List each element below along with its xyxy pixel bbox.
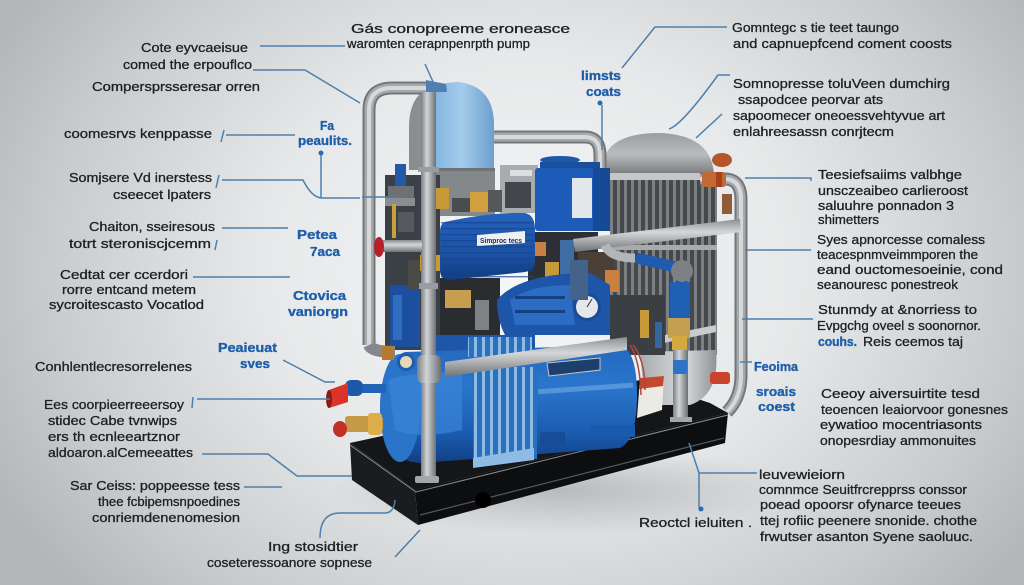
text block: right 5: Evpgchg oveel s soonornor. bbox=[817, 318, 981, 333]
text block: right 7: comnmce Seuitfrcrepprss conssor bbox=[759, 482, 968, 497]
text block: left 9: Sar Ceiss: poppeesse tess bbox=[70, 478, 241, 493]
text block: top center: waromten cerapnpenrpth pump bbox=[346, 36, 530, 51]
leader lines bbox=[192, 27, 813, 557]
text block: left 9 bbox=[70, 478, 241, 525]
text block: right 6 bbox=[820, 386, 1009, 448]
blue label: Ctovica: vaniorgn bbox=[288, 304, 348, 319]
text block: right 6: onopesrdiay ammonuites bbox=[820, 433, 977, 448]
text block: right 2 bbox=[733, 76, 950, 139]
text block: right 4: Syes apnorcesse comaless bbox=[817, 232, 986, 247]
text block: left 9: thee fcbipemsnpoedines bbox=[98, 494, 240, 509]
wiring bbox=[630, 345, 645, 395]
text block: left 1 bbox=[123, 40, 252, 72]
text block: right 4: seanouresc ponestreok bbox=[817, 277, 959, 292]
warning label bbox=[637, 376, 664, 418]
text block: left 6: Cedtat cer ccerdori bbox=[60, 267, 188, 282]
text block: right 1: Gomntegc s tie teet taungo bbox=[732, 20, 899, 35]
blue label: Peaieuat bbox=[218, 340, 278, 371]
tank name plate bbox=[547, 358, 600, 376]
text block: right 7: frwutser asanton Syene saoluuc. bbox=[760, 529, 973, 544]
brass connector bbox=[333, 413, 383, 437]
text block: right 3: shimetters bbox=[818, 212, 879, 227]
text block: bottom: Ing stosidtier bbox=[268, 539, 359, 554]
lower left elbow and gauge bbox=[369, 345, 415, 371]
inner machinery clutter bbox=[385, 164, 665, 365]
text block: left 5: totrt steroniscjcemm bbox=[69, 236, 211, 251]
middle long pipe bbox=[573, 219, 741, 252]
blue label: Feoima: coest bbox=[758, 399, 796, 414]
right pipe loop bbox=[700, 179, 741, 412]
blue control box bbox=[535, 156, 610, 231]
blue label: Fa peaulits: peaulits. bbox=[298, 133, 352, 148]
text block: right 2: sapoomecer oneoessvehtyvue art bbox=[733, 108, 945, 123]
red hose connector bbox=[326, 380, 386, 408]
text block: right 7: ttej rofiic peenere snonide. chothe bbox=[760, 513, 977, 528]
text block: right 7: poead opoorsr ofynarce teeues bbox=[760, 497, 962, 512]
text block: left 3: coomesrvs kenppasse bbox=[64, 126, 212, 141]
text block: right 4: teacespnmveimmporen the bbox=[817, 247, 978, 262]
text block: left 8: ers th ecnleeartznor bbox=[48, 429, 181, 444]
blue label: Feoima bbox=[754, 359, 799, 414]
blue label: limsts coats bbox=[581, 68, 621, 99]
text block: right 7: leuvewieiorn bbox=[759, 467, 845, 482]
blue label: Peaieuat: Peaieuat bbox=[218, 340, 278, 355]
text block: right 5: couhs. bbox=[818, 334, 857, 349]
text block: bottom bbox=[207, 539, 372, 570]
left red inlet valve bbox=[374, 237, 422, 257]
text block: right 5 bbox=[817, 302, 981, 349]
tank cooling fins bbox=[473, 367, 537, 459]
text block: left 2: Compersprsseresar orren bbox=[92, 79, 260, 94]
text block: left 1: comed the erpouflco bbox=[123, 57, 252, 72]
blue elbow with valve bbox=[570, 245, 693, 422]
text block: right 6: eywatioo mocentriasonts bbox=[820, 417, 983, 432]
text block: left 6: rorre entcand metem bbox=[62, 282, 196, 297]
text block: left 8: stidec Cabe tvnwips bbox=[48, 413, 178, 428]
text block: left 7: Conhlentlecresorrelenes bbox=[35, 359, 193, 374]
text block: left 8: Ees coorpieerreeersoy bbox=[44, 397, 185, 412]
text block: right 6: teoencen leaiorvoor gonesnes bbox=[821, 402, 1009, 417]
text block: top center bbox=[346, 21, 570, 51]
text block: right 3 bbox=[818, 167, 968, 227]
text block: left 5 bbox=[69, 219, 216, 251]
text block: right 2: enlahreesassn conrjtecm bbox=[733, 124, 894, 139]
text block: bottom: coseteressoanore sopnese bbox=[207, 555, 372, 570]
text block: top center: Gás conopreeme eroneasce bbox=[351, 21, 570, 36]
top pipe clamp bbox=[426, 80, 447, 92]
text block: left 6 bbox=[49, 267, 204, 312]
machine: gas compressor unit bbox=[326, 80, 790, 535]
text block: right 3: Teesiefsaiims valbhge bbox=[818, 167, 962, 182]
floor shadow bbox=[330, 445, 790, 535]
text block: right 4 bbox=[817, 232, 1003, 292]
pipe: left riser bbox=[369, 88, 432, 345]
pipe: central riser bbox=[415, 92, 441, 483]
text block: left 1: Cote eyvcaeisue bbox=[141, 40, 248, 55]
blue label: limsts coats: limsts bbox=[581, 68, 621, 83]
text block: right 3: unsczeaibeo carlieroost bbox=[818, 183, 968, 198]
blue label: Peaieuat: sves bbox=[240, 356, 270, 371]
blue label: Fa peaulits bbox=[298, 118, 352, 148]
blue horizontal tank bbox=[380, 337, 637, 468]
right gray tank bbox=[603, 133, 717, 405]
blue label: Fa peaulits: Fa bbox=[320, 118, 335, 133]
blue label: Petea: 7aca bbox=[310, 244, 341, 259]
blue label: Petea bbox=[297, 227, 341, 259]
blue label: limsts coats: coats bbox=[586, 84, 621, 99]
pressure gauge bbox=[573, 293, 601, 321]
blue label: Petea: Petea bbox=[297, 227, 338, 242]
text block: bottom callout: Reoctcl ieluiten . bbox=[639, 515, 752, 530]
text block: left 9: conriemdenenomesion bbox=[92, 510, 240, 525]
text block: right 2: ssapodcee peorvar ats bbox=[738, 92, 884, 107]
blue motor bbox=[440, 213, 535, 280]
base platform bbox=[350, 380, 728, 525]
text block: left 4: cseecet lpaters bbox=[113, 187, 212, 202]
text block: right 3: saluuhre ponnadon 3 bbox=[818, 198, 954, 213]
motor label: Simproc tecs bbox=[480, 236, 522, 245]
upper blue vessel bbox=[409, 82, 495, 216]
right orange valves bbox=[702, 153, 732, 384]
blue label: Ctovica: Ctovica bbox=[293, 288, 347, 303]
box label bbox=[572, 178, 592, 218]
blue label: Feoima: Feoima bbox=[754, 359, 799, 374]
upper horizontal pipe bbox=[494, 137, 600, 172]
text block: left 8: aldoaron.alCemeeattes bbox=[48, 445, 194, 460]
text block: right 6: Ceeoy aiversuirtite tesd bbox=[821, 386, 980, 401]
text block: right 1 bbox=[732, 20, 953, 51]
blue label: Feoima: sroais bbox=[756, 384, 796, 399]
text block: right 7 bbox=[759, 467, 977, 544]
blue label: Ctovica bbox=[288, 288, 348, 319]
text block: right 4: eand ouctomesoeinie, cond bbox=[817, 262, 1003, 277]
text block: left 8 bbox=[44, 397, 194, 460]
text block: right 1: and capnuepfcend coment coosts bbox=[733, 36, 953, 51]
lower compressor with gauge bbox=[497, 273, 610, 335]
text block: left 4 bbox=[69, 170, 213, 202]
text block: right 5: Stunmdy at &norriess to bbox=[818, 302, 977, 317]
text block: left 5: Chaiton, sseiresous bbox=[89, 219, 216, 234]
text block: left 4: Somjsere Vd inerstess bbox=[69, 170, 213, 185]
front horizontal pipe bbox=[445, 337, 627, 377]
text block: right 2: Somnopresse toluVeen dumchirg bbox=[733, 76, 950, 91]
text block: left 6: sycroitescasto Vocatlod bbox=[49, 297, 204, 312]
text block: right 5: Reis ceemos taj bbox=[863, 334, 963, 349]
